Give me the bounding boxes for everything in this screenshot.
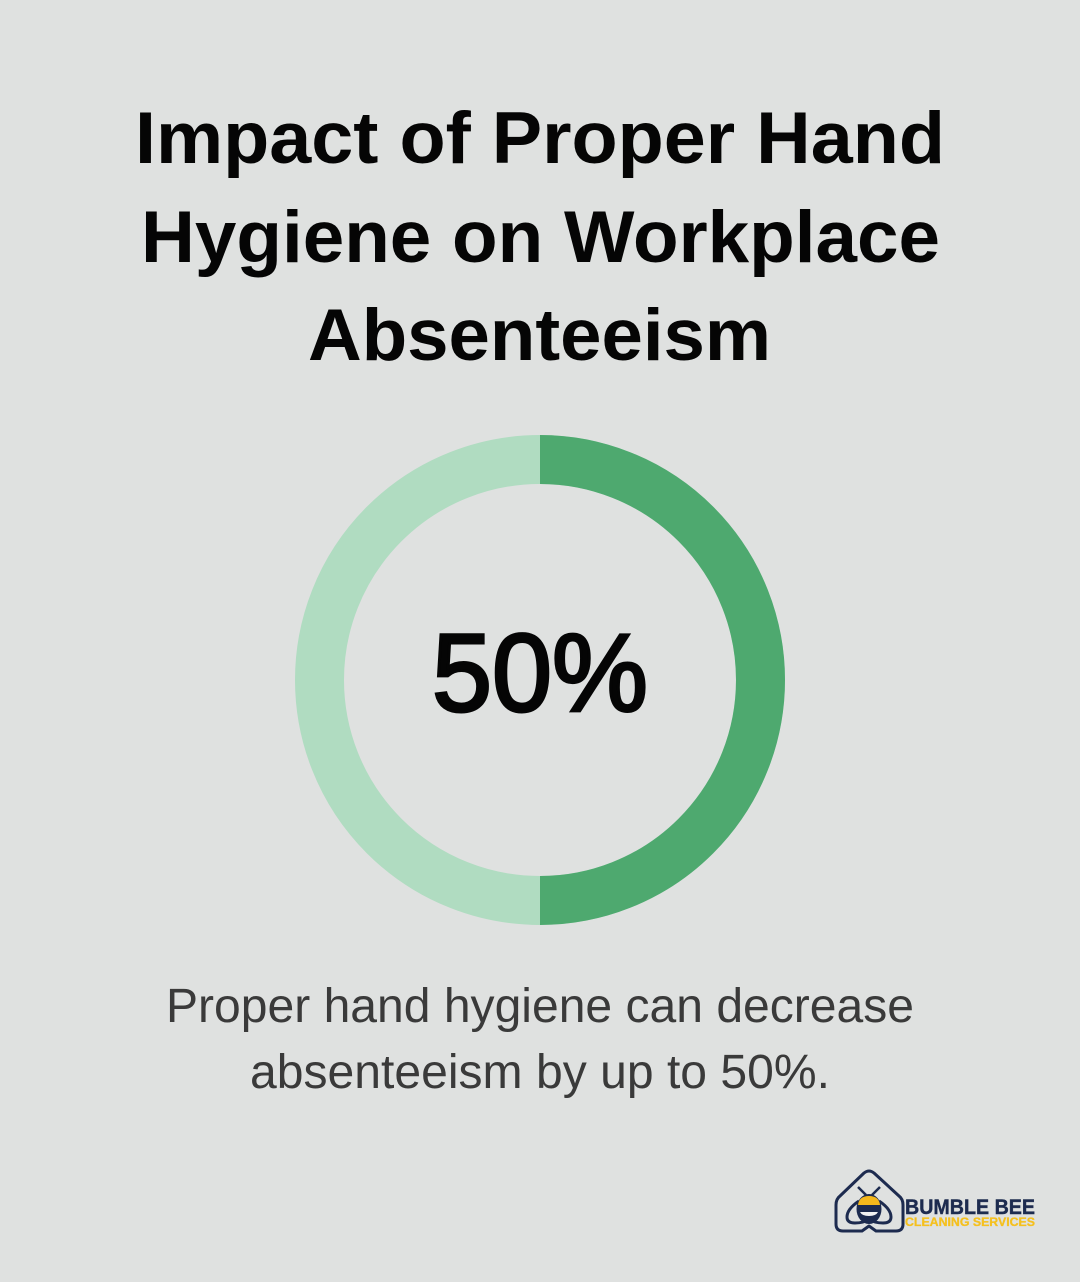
logo text: tagline: CLEANING SERVICES: [905, 1215, 1035, 1229]
description text: absenteeism by up to 50%.: [250, 1046, 830, 1099]
description text: Proper hand hygiene can decrease: [166, 980, 914, 1033]
icon: bee: [847, 1187, 891, 1224]
donut chart: 50%: [320, 460, 760, 900]
description text: [166, 980, 914, 1099]
title: [135, 98, 945, 376]
title: Hygiene on Workplace: [141, 197, 940, 278]
title: Absenteeism: [308, 295, 771, 376]
center value: 50%: [432, 612, 648, 735]
logo text: company name: BUMBLE BEE: [905, 1196, 1035, 1219]
title: Impact of Proper Hand: [135, 98, 945, 179]
icon: house outline: [836, 1171, 903, 1231]
logo: Bumble Bee Cleaning Services: [836, 1171, 1035, 1231]
